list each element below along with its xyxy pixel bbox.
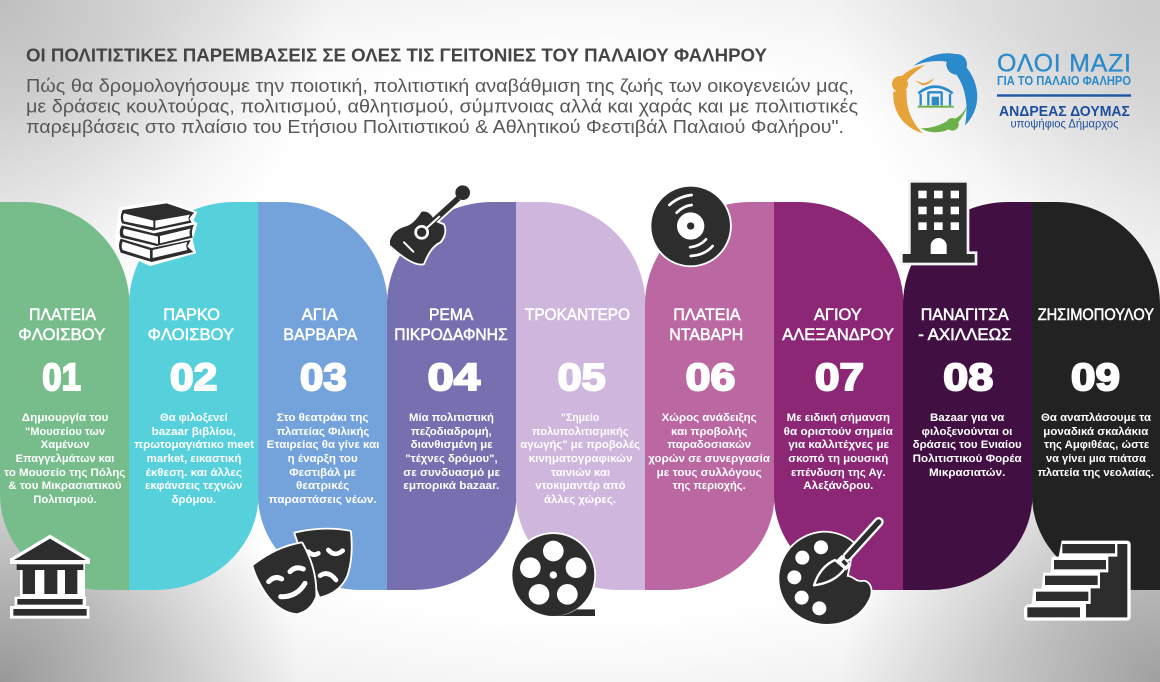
description 07: επένδυση της Αγ. <box>791 467 886 479</box>
icon: vinyl record <box>651 187 730 265</box>
heading 08: - ΑΧΙΛΛΕΩΣ <box>918 326 1012 344</box>
heading 07: ΑΛΕΞΑΝΔΡΟΥ <box>782 326 894 344</box>
description 02: εκφάνσεις τεχνών <box>145 480 242 492</box>
logo text: ΟΛΟΙ ΜΑΖΙ: ΟΛΟΙ ΜΑΖΙ <box>997 50 1131 78</box>
description 05: ντοκιμαντέρ από <box>535 480 626 492</box>
description 08: Μικρασιατών. <box>929 467 1005 479</box>
description 07 <box>784 412 894 492</box>
description 05: άλλες χώρες. <box>544 494 616 506</box>
description 06: της περιοχής. <box>673 480 746 492</box>
description 08 <box>913 412 1022 479</box>
description 06: με τους συλλόγους <box>657 467 762 479</box>
description 06: παραδοσιακών <box>667 439 751 451</box>
description 09: πλατεία της νεολαίας. <box>1038 467 1154 479</box>
logo <box>892 50 1131 133</box>
description 05 <box>520 412 641 506</box>
description 05: ταινιών και <box>551 467 610 479</box>
icon: guitar <box>390 183 472 264</box>
number 02: 02 <box>170 357 217 399</box>
heading 07 <box>782 306 894 344</box>
heading 01 <box>18 306 105 344</box>
heading 01: ΠΛΑΤΕΙΑ <box>29 306 96 324</box>
description 05: κινηματογραφικών <box>529 453 633 465</box>
heading 08 <box>918 306 1012 344</box>
description 07: θα οριστούν σημεία <box>784 426 894 438</box>
icon: film reel <box>512 534 598 616</box>
description 04 <box>403 412 500 492</box>
description 07: σκοπό τη μουσική <box>788 453 888 465</box>
description 03: Φεστιβάλ με <box>289 467 356 479</box>
description 05: "Σημείο <box>561 412 600 424</box>
description 03: Εταιρείας θα γίνε και <box>267 439 379 451</box>
description 09: της Αμφιθέας, ώστε <box>1044 439 1149 451</box>
description 08: φιλοξενούνται οι <box>922 426 1012 438</box>
panel: 06 Πλατεία Νταβάρη <box>645 187 774 590</box>
description 08: δράσεις του Ενιαίου <box>913 439 1022 451</box>
description 01: Δημιουργία του <box>22 412 108 424</box>
description 04: "τέχνες δρόμου", <box>405 453 498 465</box>
logo text: candidate name: ΑΝΔΡΕΑΣ ΔΟΥΜΑΣ <box>999 103 1130 120</box>
number 06: 06 <box>686 357 735 399</box>
description 03: πλατείας Φιλικής <box>277 426 370 438</box>
number 08: 08 <box>943 357 993 399</box>
heading 01: ΦΛΟΙΣΒΟΥ <box>18 326 105 344</box>
description 04: πεζοδιαδρομή, <box>411 426 492 438</box>
panel: 08 Παναγίτσα - Αχιλλέως <box>900 180 1032 590</box>
heading 06 <box>669 306 743 344</box>
description 04: εμπορικά bazaar. <box>403 480 499 492</box>
description 03: παραστάσεις νέων. <box>269 494 377 506</box>
description 09 <box>1038 412 1154 479</box>
heading 04: ΡΕΜΑ <box>429 306 473 324</box>
logo text: candidate role: υποψήφιος Δήμαρχος <box>1010 116 1119 130</box>
panel: 03 Αγία Βαρβάρα <box>253 202 388 613</box>
title: ΟΙ ΠΟΛΙΤΙΣΤΙΚΕΣ ΠΑΡΕΜΒΑΣΕΙΣ ΣΕ ΟΛΕΣ ΤΙΣ ΓΕΙΤΟΝΙΕΣ ΤΟΥ ΠΑΛΑΙΟΥ ΦΑΛΗΡΟΥ <box>26 44 768 66</box>
description 02: market, εικαστική <box>147 453 241 465</box>
description 01: Χαμένων <box>41 439 90 451</box>
description 01: το Μουσείο της Πόλης <box>4 467 126 479</box>
description 02: δρόμου. <box>172 494 216 506</box>
description 09: μοναδικά σκαλάκια <box>1043 426 1149 438</box>
description 01: "Μουσείου των <box>25 426 105 438</box>
description 03: Στο θεατράκι της <box>277 412 369 424</box>
heading 07: ΑΓΙΟΥ <box>814 306 862 324</box>
panel: 01 Πλατεία Φλοίσβου <box>0 202 130 619</box>
description 08: Bazaar για να <box>930 412 1005 424</box>
icon: building <box>900 180 977 265</box>
description 03: η έναρξη του <box>288 453 358 465</box>
description 01: Πολιτισμού. <box>33 494 97 506</box>
description 02: πρωτομαγιάτικο meet <box>134 439 255 451</box>
number 05: 05 <box>558 357 606 399</box>
description 04: διανθισμένη με <box>411 439 493 451</box>
description 02: έκθεση. και άλλες <box>146 467 243 479</box>
description 05: αγωγής" με προβολές <box>520 439 641 451</box>
description 02 <box>134 412 255 506</box>
number 03: 03 <box>300 357 347 399</box>
heading 06: ΝΤΑΒΑΡΗ <box>669 326 743 344</box>
description 09: Θα αναπλάσουμε τα <box>1041 412 1152 424</box>
description 08: Πολιτιστικού Φορέα <box>913 453 1022 465</box>
intro text: Πώς θα δρομολογήσουμε την ποιοτική, πολιτιστική αναβάθμιση της ζωής των οικογενειών μας, <box>26 75 854 96</box>
description 01 <box>4 412 126 506</box>
icon: palette and brush <box>779 522 879 624</box>
number 07: 07 <box>815 357 864 399</box>
heading 05: ΤΡΟΚΑΝΤΕΡΟ <box>525 306 630 324</box>
heading 03: ΒΑΡΒΑΡΑ <box>283 326 357 344</box>
heading 03: ΑΓΙΑ <box>302 306 338 324</box>
heading 02: ΦΛΟΙΣΒΟΥ <box>148 326 234 344</box>
heading 08: ΠΑΝΑΓΙΤΣΑ <box>921 306 1009 324</box>
description 07: Με ειδική σήμανση <box>787 412 890 424</box>
heading 02: ΠΑΡΚΟ <box>163 306 220 324</box>
panel: 02 Πάρκο Φλοίσβου <box>115 200 258 590</box>
intro text: με δράσεις κουλτούρας, πολιτισμού, αθλητισμού, σύμπνοιας αλλά και χαράς και με πολιτιστικές <box>26 96 858 116</box>
icon: stairs <box>1024 541 1131 621</box>
description 06: και προβολής <box>671 426 748 438</box>
description 01: & του Μικρασιατικού <box>8 480 122 492</box>
description 04: Μία πολιτιστική <box>409 412 494 424</box>
description 02: Θα φιλοξενεί <box>160 412 228 424</box>
panel: 07 Αγίου Αλεξάνδρου <box>774 202 904 624</box>
description 05: πολυπολιτισμικής <box>532 426 629 438</box>
logo emblem <box>892 53 977 133</box>
description 06: χορών σε συνεργασία <box>648 453 771 465</box>
description 04: σε συνδυασμό με <box>403 467 500 479</box>
heading 04 <box>394 306 508 344</box>
panel: 04 Ρέμα Πικροδάφνης <box>387 183 516 590</box>
panel: 05 Τροκαντέρο <box>512 202 646 616</box>
description 09: να γίνει μια πιάτσα <box>1046 453 1146 465</box>
icon: theatre masks <box>253 530 351 613</box>
heading 06: ΠΛΑΤΕΙΑ <box>673 306 741 324</box>
icon: books <box>115 200 197 266</box>
description 01: Επαγγελμάτων και <box>16 453 114 465</box>
description 07: Αλεξάνδρου. <box>803 480 873 492</box>
description 03: θεατρικές <box>296 480 350 492</box>
icon: museum <box>10 535 90 619</box>
description 06: Χώρος ανάδειξης <box>662 412 757 424</box>
number 04: 04 <box>428 357 480 399</box>
heading 04: ΠΙΚΡΟΔΑΦΝΗΣ <box>394 326 508 344</box>
panel: 09 Ζησιμοπούλου <box>1024 202 1160 621</box>
heading 03 <box>283 306 357 344</box>
logo text: για το Παλαιό Φάληρο: ΓΙΑ ΤΟ ΠΑΛΑΙΟ ΦΑΛΗΡΟ <box>997 74 1131 88</box>
intro text <box>26 75 858 137</box>
description 02: bazaar βιβλίου, <box>152 426 236 438</box>
description 03 <box>267 412 379 506</box>
number 09: 09 <box>1071 357 1120 399</box>
number 01: 01 <box>42 357 81 399</box>
description 06 <box>648 412 771 492</box>
heading 02 <box>148 306 234 344</box>
intro text: παρεμβάσεις στο πλαίσιο του Ετήσιου Πολιτιστικού & Αθλητικού Φεστιβάλ Παλαιού Φαλήρου". <box>26 116 844 137</box>
description 07: για καλλιτέχνες με <box>788 439 889 451</box>
